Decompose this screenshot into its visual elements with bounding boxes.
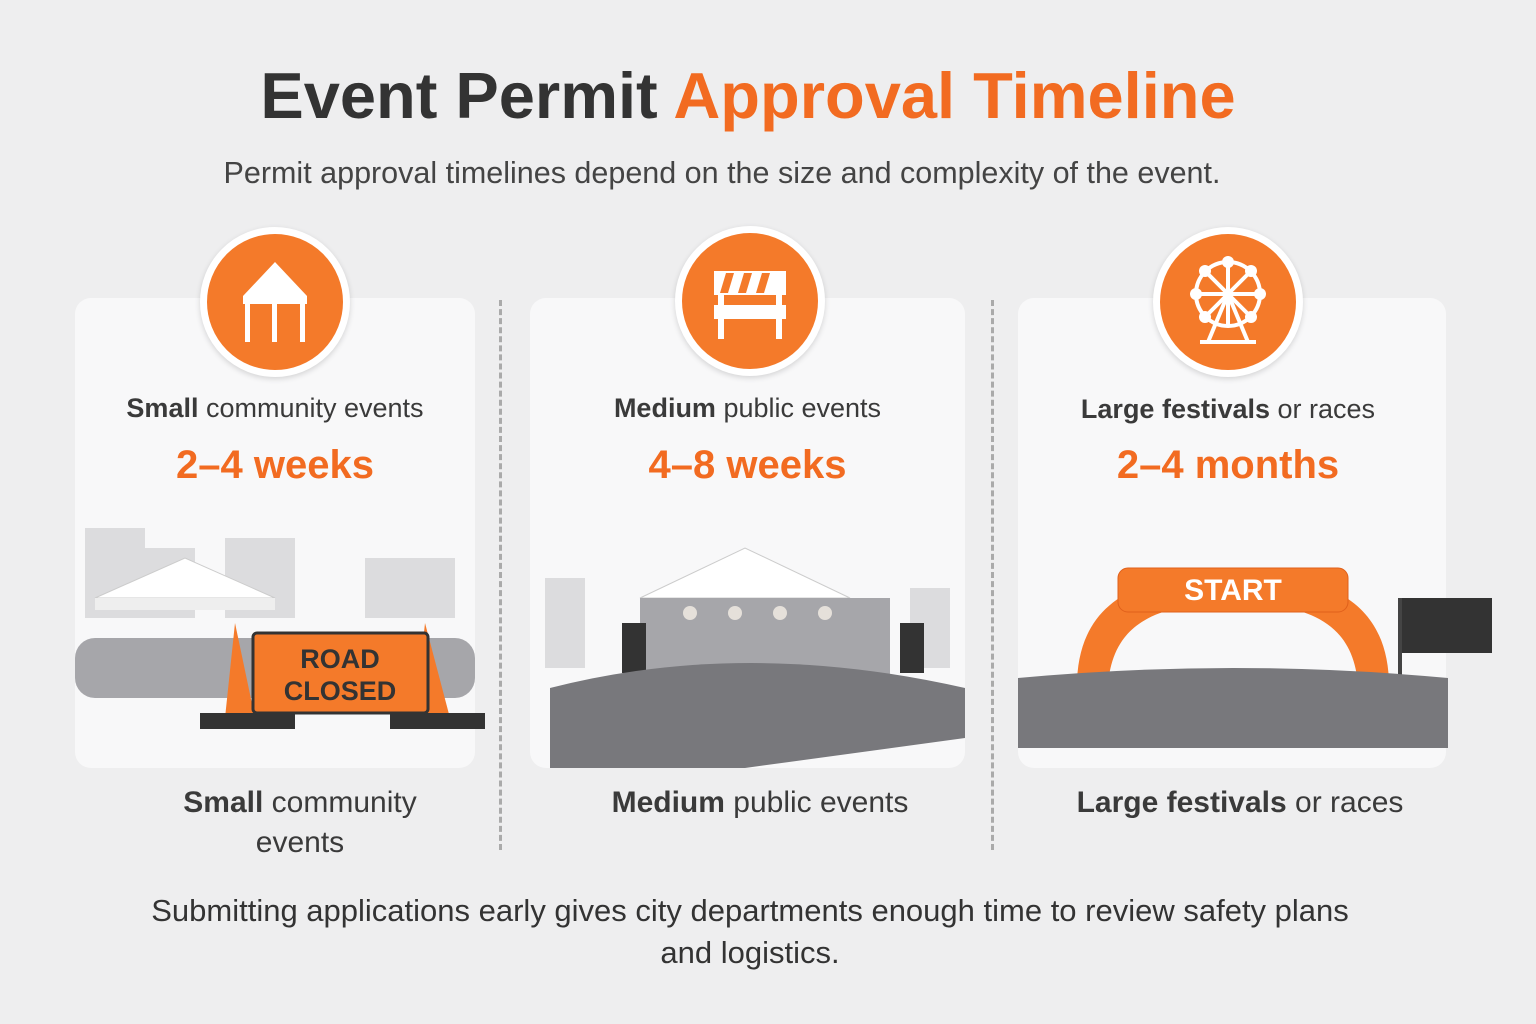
label: large: Large festivals or races (1081, 394, 1375, 424)
label: medium: Medium public events (614, 393, 881, 423)
illustration: small: CLOSED (284, 676, 396, 706)
icon: tent (200, 227, 350, 377)
title: Event Permit Approval Timeline (260, 59, 1236, 132)
panel: medium (530, 298, 965, 768)
footer text (151, 893, 1349, 970)
bottom label: medium: Medium public events (612, 786, 908, 819)
sign text: ROAD (300, 644, 380, 674)
bottom label: small (183, 786, 417, 859)
illustration: stage (545, 548, 965, 768)
duration: large: 2–4 months (1117, 443, 1339, 487)
icon: barrier (675, 226, 825, 376)
bottom label: small: Small community (183, 786, 417, 819)
icon: ferris wheel (1153, 227, 1303, 377)
footer text: Submitting applications early gives city departments enough time to review safety plans (151, 893, 1349, 928)
illustration: start arch: START (1184, 574, 1282, 607)
illustration: small (75, 528, 485, 729)
subtitle: Permit approval timelines depend on the size and complexity of the event. (224, 156, 1220, 190)
duration: small: 2–4 weeks (176, 443, 374, 487)
illustration: start arch (1018, 568, 1492, 748)
label: small: Small community events (126, 393, 424, 423)
panel: small (75, 298, 475, 768)
divider (499, 300, 502, 850)
bottom label: large: Large festivals or races (1077, 786, 1403, 819)
bottom label: small: events (256, 826, 344, 859)
panel: large (1018, 298, 1446, 768)
duration: medium: 4–8 weeks (649, 443, 846, 487)
footer text: and logistics. (660, 935, 840, 970)
